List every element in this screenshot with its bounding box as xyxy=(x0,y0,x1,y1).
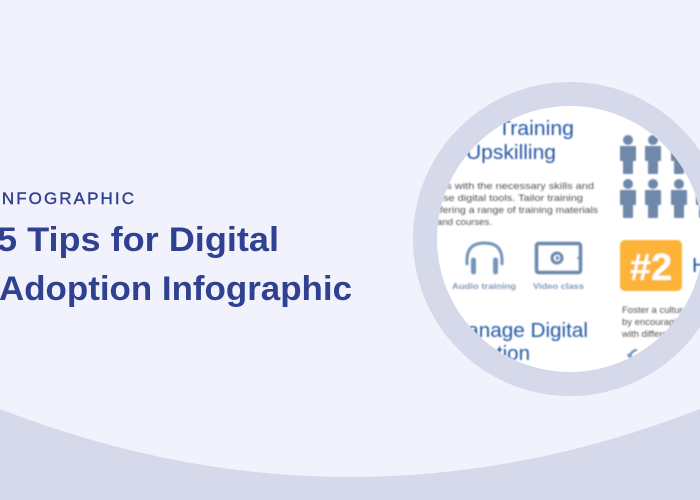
title: Adoption Infographic xyxy=(0,270,352,308)
heading: manage digital: Manage Digital xyxy=(450,319,588,342)
lens content: infographic excerpt xyxy=(434,117,700,365)
label: audio training: Audio training xyxy=(452,281,516,291)
heading: training and upskilling: Training xyxy=(498,117,574,140)
badge: #2: #2 xyxy=(630,247,672,289)
body text: training: ees with the necessary skills and xyxy=(434,181,594,192)
icon fragment xyxy=(628,350,637,357)
body text: fostering culture: with different xyxy=(621,329,676,340)
body text: fostering culture: Foster a culture xyxy=(622,305,688,316)
people icons xyxy=(620,135,700,218)
magnifier lens xyxy=(425,94,700,384)
heading: manage digital: Adoption xyxy=(449,342,530,365)
icon: video tablet xyxy=(536,244,580,272)
lens ring xyxy=(425,94,700,384)
title: 5 Tips for Digital xyxy=(0,221,279,259)
icon: headphones xyxy=(467,243,502,272)
body text: training: use digital tools. Tailor training xyxy=(437,193,583,204)
body text: training: ffering a range of training materials xyxy=(437,205,598,216)
title xyxy=(0,221,352,308)
heading: manage digital xyxy=(470,321,588,361)
body text: training xyxy=(434,181,598,228)
label: video class: Video class xyxy=(533,281,584,291)
body text: fostering culture: by encouraging xyxy=(622,317,687,328)
heading: training and upskilling xyxy=(466,117,574,164)
badge: #2 xyxy=(620,240,682,291)
bottom curved band xyxy=(0,409,700,500)
body text: training: and courses. xyxy=(437,217,492,228)
body text: fostering culture xyxy=(621,306,684,338)
heading: training and upskilling: Upskilling xyxy=(466,141,556,164)
